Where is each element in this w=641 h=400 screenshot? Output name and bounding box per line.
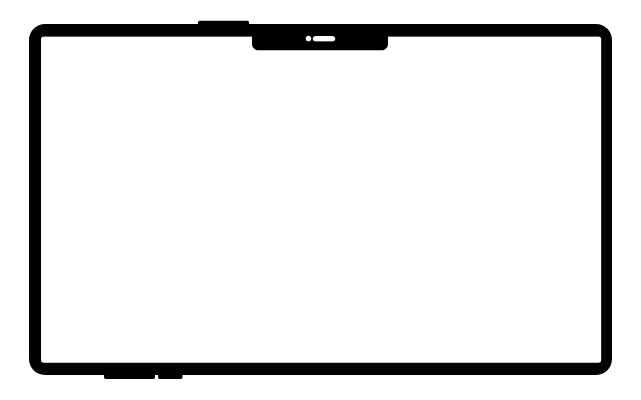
camera notch [252,30,388,50]
speaker pill [313,36,335,41]
device frame [29,24,612,375]
camera dot [306,36,311,41]
bottom side button left [104,370,155,379]
bottom side button right [158,370,182,379]
top side button [198,21,249,29]
